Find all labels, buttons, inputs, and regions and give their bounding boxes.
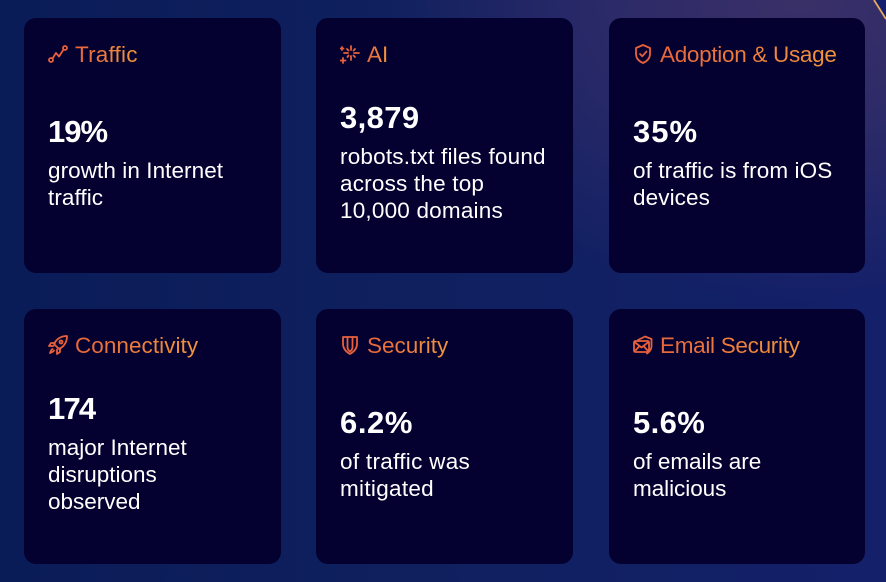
description: growth: growth in Internet [48,158,223,183]
heading: AI [340,42,388,67]
heading: AI: AI [367,42,388,67]
stat: 6.2%: 6.2% [340,405,413,440]
description: iOS traffic [633,158,832,210]
description: mitigated [340,449,470,501]
panel: traffic [24,18,281,273]
description: mitigated: of traffic was [340,449,470,474]
heading: traffic: Traffic [75,42,138,67]
stat: 3,879: 3,879 [340,100,420,135]
description: mitigated: mitigated [340,476,434,501]
stat: 19%: 19% [48,114,107,149]
description: iOS traffic: devices [633,185,710,210]
stat: 35%: 35% [633,114,698,149]
panel: AI [316,18,573,273]
heading: email security: Email Security [660,333,800,358]
description: robots.txt: robots.txt files found [340,144,546,169]
description: disruptions [48,435,187,514]
description: growth: traffic [48,185,103,210]
decorative corner line [873,0,886,20]
heading: security: Security [367,333,448,358]
description: malicious [633,449,761,501]
heading: traffic [48,42,138,67]
heading: adoption and usage: Adoption & Usage [660,42,837,67]
description: malicious: of emails are [633,449,761,474]
description: robots.txt: 10,000 domains [340,198,503,223]
panel: connectivity [24,309,281,564]
description: robots.txt [340,144,546,223]
description: disruptions: major Internet [48,435,187,460]
description: disruptions: observed [48,489,141,514]
panel: security [316,309,573,564]
stat: 174: 174 [48,391,94,426]
description: growth [48,158,223,210]
stat: 5.6%: 5.6% [633,405,705,440]
description: disruptions: disruptions [48,462,157,487]
description: iOS traffic: of traffic is from iOS [633,158,832,183]
panel: email security [609,309,865,564]
panel: adoption and usage [609,18,865,273]
heading: connectivity: Connectivity [75,333,198,358]
description: robots.txt: across the top [340,171,484,196]
description: malicious: malicious [633,476,726,501]
